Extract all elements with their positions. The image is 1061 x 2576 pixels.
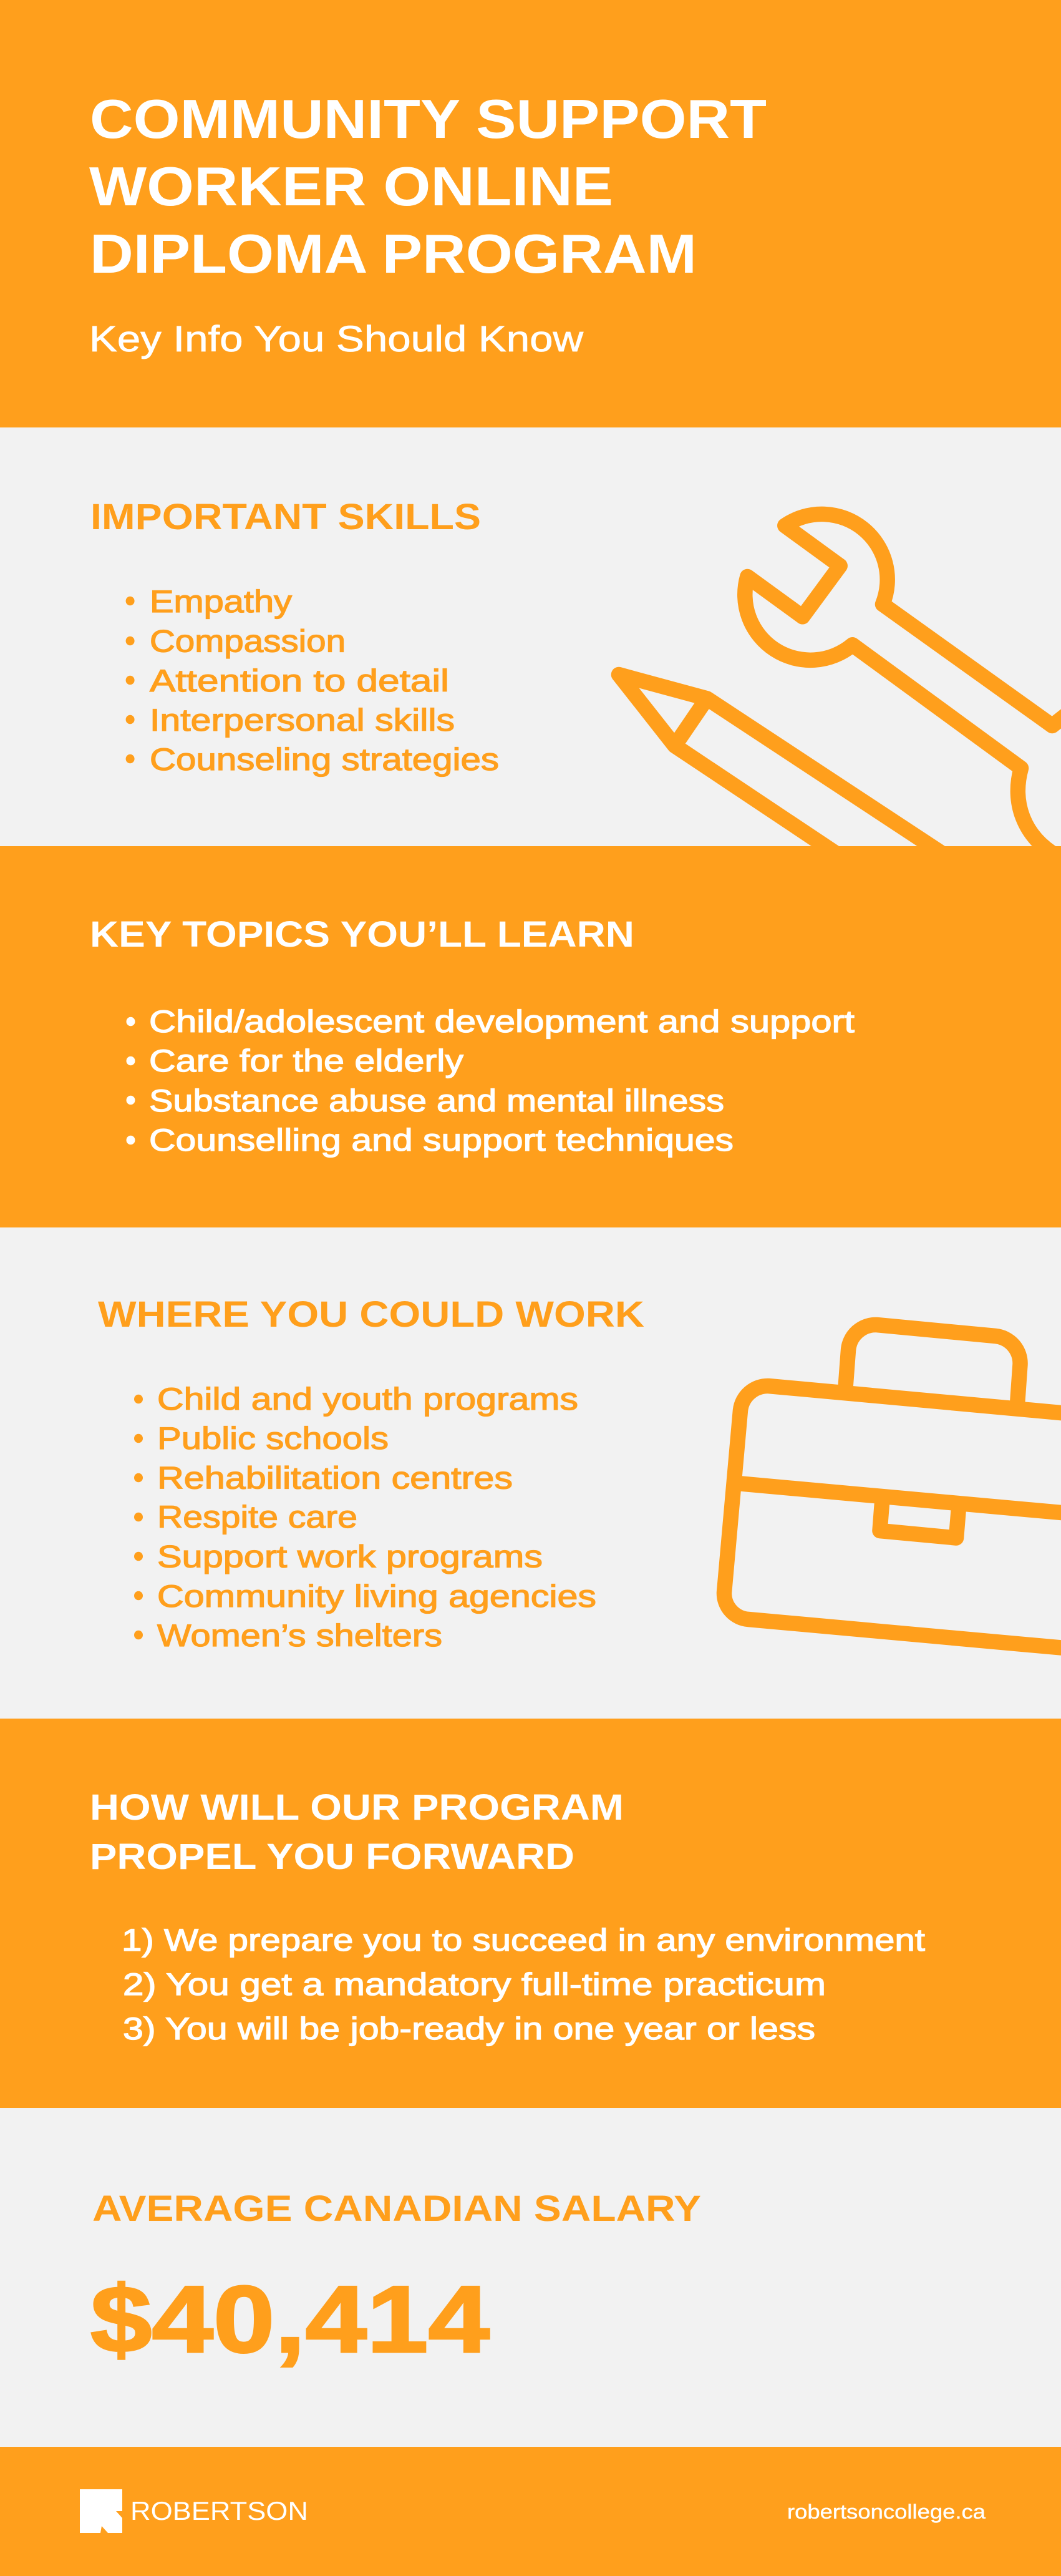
title: WORKER ONLINE xyxy=(89,155,613,217)
heading: important skills: IMPORTANT SKILLS xyxy=(90,497,481,537)
subtitle: Key Info You Should Know xyxy=(89,319,584,359)
salary background xyxy=(0,2108,1061,2447)
skills list: Counseling strategies xyxy=(150,742,499,777)
skills list xyxy=(126,584,499,777)
key topics list: Counselling and support techniques xyxy=(149,1123,734,1158)
work list: Women’s shelters xyxy=(157,1618,442,1653)
key topics list: Substance abuse and mental illness xyxy=(149,1083,724,1118)
key topics background xyxy=(0,846,1061,1227)
key topics list: Child/adolescent development and support xyxy=(149,1004,855,1039)
work list: Respite care xyxy=(157,1500,357,1534)
icon: pencil xyxy=(619,675,941,852)
work background xyxy=(0,1227,1061,1719)
skills list: Attention to detail xyxy=(150,663,449,698)
skills list: Interpersonal skills xyxy=(150,703,455,738)
skills list: Compassion xyxy=(150,624,346,659)
title xyxy=(89,88,767,285)
panel: skills xyxy=(0,427,1061,856)
panel: program benefits xyxy=(0,1719,1061,2108)
work list: Community living agencies xyxy=(157,1579,596,1614)
skills background xyxy=(0,427,1061,847)
title: DIPLOMA PROGRAM xyxy=(90,223,697,285)
heading: key topics: KEY TOPICS YOU’LL LEARN xyxy=(90,914,634,955)
title: COMMUNITY SUPPORT xyxy=(90,88,767,150)
work list: Support work programs xyxy=(157,1539,543,1574)
panel: footer xyxy=(0,2447,1061,2576)
benefits numbered list: 3) You will be job-ready in one year or less xyxy=(123,2011,815,2046)
website url: robertsoncollege.ca xyxy=(787,2500,986,2523)
panel: header xyxy=(0,0,1061,427)
heading: where you could work: WHERE YOU COULD WORK xyxy=(98,1294,644,1335)
heading: how will our program propel you forward xyxy=(90,1787,624,1877)
logo wordmark: ROBERTSON xyxy=(130,2496,308,2525)
panel: key topics xyxy=(0,846,1061,1227)
heading: average canadian salary: AVERAGE CANADIAN SALARY xyxy=(92,2188,701,2229)
footer background xyxy=(0,2447,1061,2576)
heading: how will our program propel you forward: PROPEL YOU FORWARD xyxy=(90,1837,574,1877)
heading: how will our program propel you forward: HOW WILL OUR PROGRAM xyxy=(90,1787,624,1828)
key topics list: Care for the elderly xyxy=(149,1043,463,1078)
work list: Public schools xyxy=(157,1421,389,1456)
work list xyxy=(134,1382,596,1653)
panel: where you could work xyxy=(0,1227,1061,1719)
work list: Child and youth programs xyxy=(157,1382,578,1417)
panel: salary xyxy=(0,2108,1061,2447)
benefits numbered list: 2) You get a mandatory full-time practicum xyxy=(123,1967,826,2002)
header background xyxy=(0,0,1061,427)
skills list: Empathy xyxy=(150,584,292,619)
benefits background xyxy=(0,1719,1061,2108)
icon: briefcase xyxy=(724,1325,1061,1650)
work list: Rehabilitation centres xyxy=(157,1460,513,1495)
icon: robertson logo mark xyxy=(80,2489,122,2533)
benefits numbered list: 1) We prepare you to succeed in any environment xyxy=(122,1923,925,1958)
benefits numbered list xyxy=(122,1923,925,2046)
key topics list xyxy=(126,1004,855,1158)
salary figure: $40,414 xyxy=(90,2266,490,2373)
icon: wrench xyxy=(745,514,1061,856)
